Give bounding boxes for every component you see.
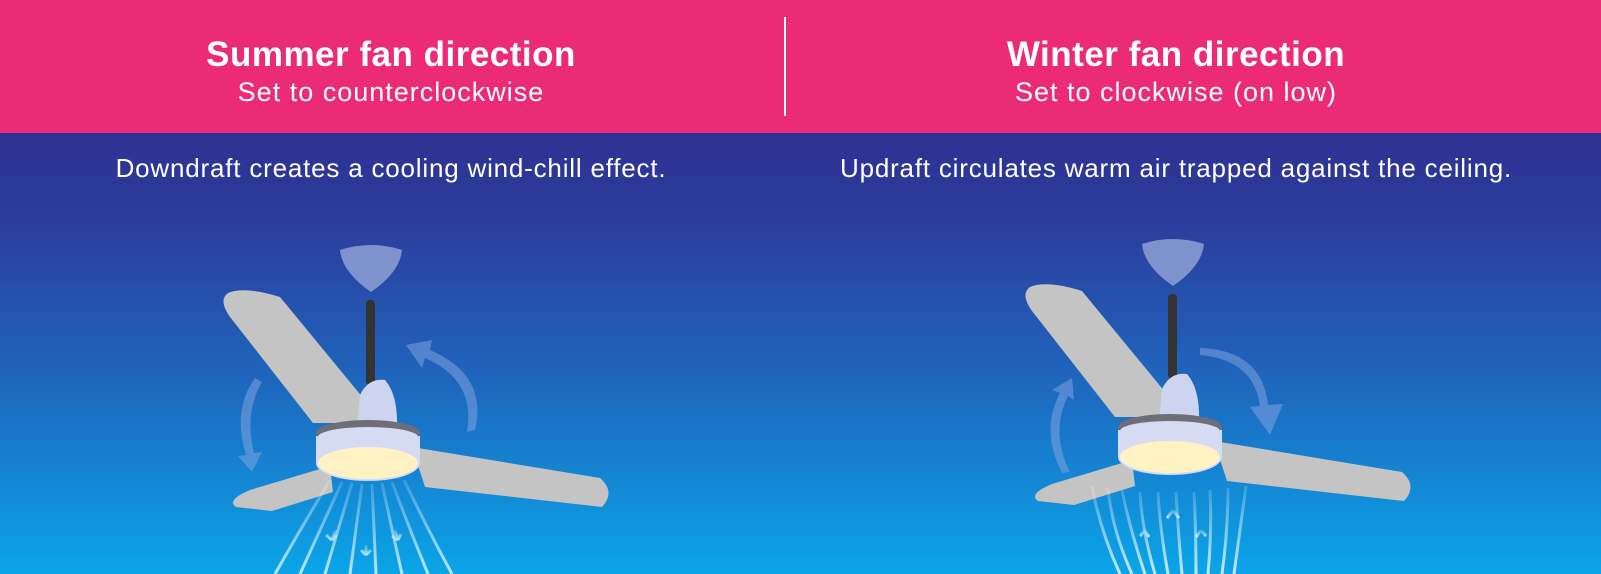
header band xyxy=(0,0,1601,133)
airflow up xyxy=(1092,486,1246,574)
heading: winter: Winter fan direction xyxy=(1007,35,1345,74)
arrow: left rotation (down) xyxy=(238,378,262,472)
heading: summer: Set to counterclockwise xyxy=(238,77,544,107)
heading: summer: Summer fan direction xyxy=(206,35,576,74)
caption: summer: Downdraft creates a cooling wind-chill effect. xyxy=(116,153,666,183)
caption: winter: Updraft circulates warm air trapped against the ceiling. xyxy=(840,153,1512,183)
arrow: right rotation (up-left) xyxy=(406,340,477,432)
airflow down xyxy=(275,480,452,574)
heading: summer xyxy=(206,35,576,107)
fan: winter xyxy=(1025,239,1411,574)
arrow: left rotation (up) xyxy=(1050,378,1074,473)
fan: summer xyxy=(223,245,609,574)
heading: winter xyxy=(1006,35,1345,107)
heading: winter: Set to clockwise (on low) xyxy=(1015,77,1337,107)
arrow: right rotation (down) xyxy=(1200,348,1283,435)
